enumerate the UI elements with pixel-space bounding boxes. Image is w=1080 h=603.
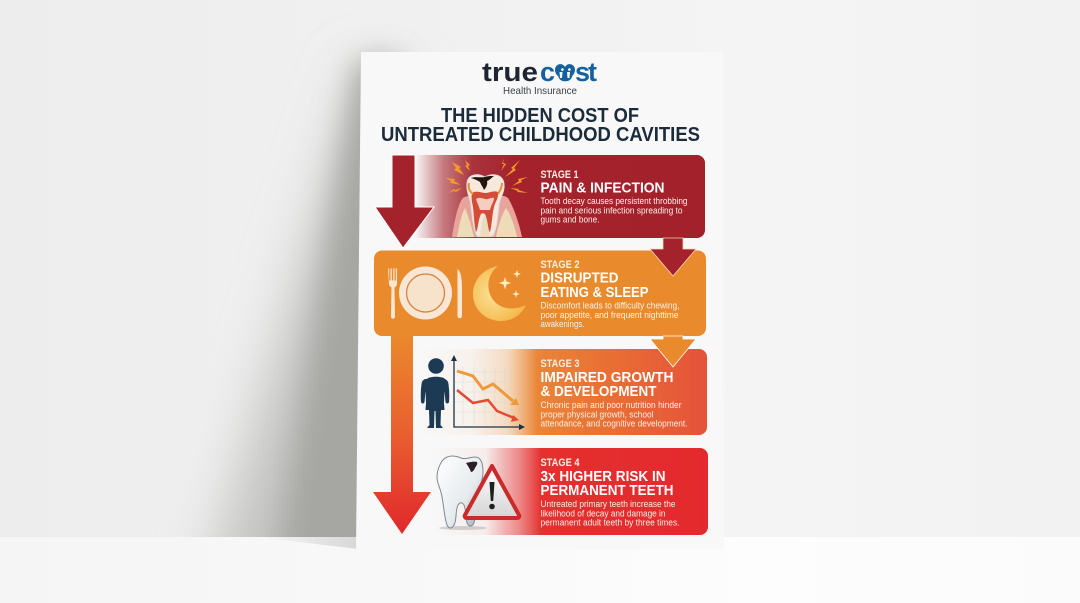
stage 4 text: permanent adult teeth by three times. [540, 518, 680, 528]
stage 3 text: IMPAIRED GROWTH [540, 369, 674, 386]
arrow: stage 1 to stage 2 [650, 238, 696, 276]
icon: warning triangle [465, 466, 519, 518]
stage 1 text: STAGE 1 [540, 169, 578, 181]
logo subtitle: Health Insurance [503, 85, 577, 97]
stage 2 text: EATING & SLEEP [540, 284, 648, 301]
icon: decayed tooth with pain bolts [445, 158, 528, 237]
stage 1 text: PAIN & INFECTION [540, 180, 664, 196]
stage 1 text: Tooth decay causes persistent throbbing [540, 196, 688, 206]
icon: cracked tooth [437, 456, 487, 530]
stage 1 text [540, 169, 688, 224]
stage 1 text: pain and serious infection spreading to [540, 206, 683, 216]
stage 4 text: 3x HIGHER RISK IN [540, 468, 666, 485]
logo wordmark: s [575, 57, 590, 87]
logo wordmark: o [557, 57, 574, 87]
stage 2 text [540, 259, 680, 329]
poster [356, 52, 724, 549]
stage 1 text: gums and bone. [540, 214, 600, 224]
stage 2 text: Discomfort leads to difficulty chewing, [540, 300, 680, 310]
poster shadow on wall [200, 60, 400, 600]
icon: fork, plate, knife [388, 266, 462, 320]
stage 4 text: likelihood of decay and damage in [540, 508, 666, 518]
icon: crescent moon and stars [473, 266, 526, 321]
logo wordmark: t [588, 57, 597, 87]
floor [0, 537, 1080, 603]
stage 3 text: attendance, and cognitive development. [540, 418, 688, 428]
stage 2 text: awakenings. [540, 319, 584, 329]
logo wordmark: true [482, 57, 538, 87]
icon: child silhouette [421, 358, 449, 428]
title: UNTREATED CHILDHOOD CAVITIES [381, 123, 700, 146]
panel: stage 3 [420, 349, 707, 435]
panel: stage 4 [430, 448, 708, 535]
logo wordmark: c [540, 57, 555, 87]
stage 3 text: STAGE 3 [540, 358, 580, 370]
chart: declining growth lines [451, 355, 525, 430]
logo [482, 57, 597, 97]
stage 2 text: STAGE 2 [540, 259, 580, 271]
stage 2 text: DISRUPTED [540, 270, 619, 286]
pain bolts [445, 158, 528, 193]
panel: stage 1 [415, 155, 705, 238]
title [381, 104, 700, 146]
stage 4 text: STAGE 4 [540, 457, 580, 469]
stage 4 text [540, 457, 680, 528]
arrow: stage 2 to stage 3 [650, 336, 696, 367]
stage 2 text: poor appetite, and frequent nighttime [540, 310, 679, 320]
arrow: orange long left shaft [373, 330, 431, 534]
stage 4 text: Untreated primary teeth increase the [540, 499, 676, 509]
stage 3 text [540, 358, 688, 428]
stage 3 text: Chronic pain and poor nutrition hinder [540, 400, 682, 410]
floor shadow [258, 537, 358, 549]
stage 3 text: proper physical growth, school [540, 410, 654, 420]
logo heart [555, 64, 575, 81]
title: THE HIDDEN COST OF [441, 104, 639, 127]
arrow: stage 1 left red arrow [375, 155, 434, 248]
stage 3 text: & DEVELOPMENT [540, 383, 656, 400]
stage 4 text: PERMANENT TEETH [540, 482, 674, 499]
panel: stage 2 [374, 250, 706, 336]
